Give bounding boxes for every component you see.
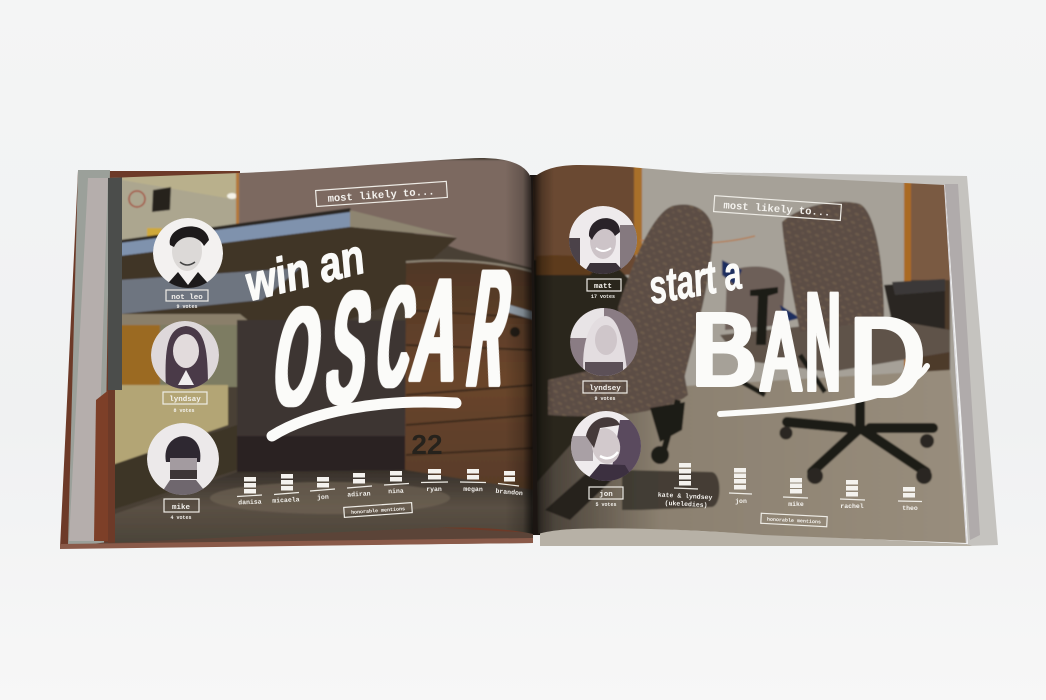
label: matt: matt bbox=[594, 283, 612, 291]
heading: OSCAR: O bbox=[268, 281, 329, 432]
chair base bbox=[787, 395, 933, 472]
tally: ryan: ryan bbox=[426, 486, 442, 493]
label: lyndsay: 8 votes bbox=[173, 408, 195, 414]
label: lyndsey: 9 votes bbox=[594, 396, 616, 402]
label: jon: 5 votes bbox=[595, 502, 617, 508]
heading: BAND: N bbox=[806, 263, 840, 420]
speaker bbox=[152, 187, 171, 212]
label: matt bbox=[587, 279, 621, 300]
panel: left page photo bbox=[100, 150, 540, 550]
label: lyndsay bbox=[163, 392, 207, 414]
heading: OSCAR bbox=[267, 239, 520, 436]
label: mike: 4 votes bbox=[170, 515, 192, 521]
heading: start a: start a bbox=[645, 247, 745, 314]
heading: BAND bbox=[692, 263, 927, 420]
tally: nina: nina bbox=[388, 488, 404, 495]
tally: kate & lyndsey bbox=[658, 463, 713, 509]
tally: jon bbox=[729, 468, 752, 505]
label: lyndsey bbox=[583, 381, 627, 402]
label: not leo: not leo bbox=[171, 294, 203, 302]
wood box bbox=[405, 260, 534, 490]
dark left furniture bbox=[534, 260, 629, 484]
heading: most likely to (left) bbox=[316, 181, 447, 207]
heading: most likely to (right): most likely to... bbox=[723, 200, 831, 220]
portrait: mike bbox=[147, 423, 219, 495]
tally: micaela: micaela bbox=[272, 496, 300, 505]
heading: win an: win an bbox=[239, 230, 370, 312]
portrait: lyndsey bbox=[570, 308, 638, 378]
floor bbox=[115, 470, 528, 533]
label: mike: mike bbox=[172, 504, 190, 512]
beam bbox=[120, 268, 300, 314]
tally: mike: mike bbox=[788, 501, 804, 508]
tally: kate & lyndsey: kate & lyndsey bbox=[658, 492, 713, 501]
heading: OSCAR: C bbox=[370, 260, 422, 414]
label: matt: 17 votes bbox=[591, 294, 615, 300]
tally: danisa bbox=[237, 477, 262, 506]
brown fabric wall bbox=[237, 160, 540, 270]
dark box bbox=[237, 320, 407, 436]
underline: OSCAR bbox=[272, 402, 456, 436]
underline: BAND bbox=[720, 366, 927, 414]
label: honorable mentions (right): honorable mentions bbox=[767, 517, 821, 525]
text: R bbox=[460, 239, 520, 419]
back chair bbox=[725, 266, 785, 330]
desk and black arm bbox=[883, 284, 946, 330]
dark blob bbox=[622, 470, 720, 510]
gutter shadow bbox=[533, 169, 550, 534]
floor bbox=[530, 370, 968, 550]
orange and beige bbox=[122, 324, 161, 386]
right chair back bbox=[782, 202, 884, 332]
heading: BAND: B bbox=[692, 292, 756, 407]
tally: brandon bbox=[495, 471, 523, 497]
tally: nina bbox=[384, 471, 409, 495]
shelf bbox=[120, 208, 352, 245]
tally: theo: theo bbox=[902, 505, 918, 512]
heading: BAND: D bbox=[850, 295, 924, 420]
chair arm bbox=[750, 287, 778, 345]
tally: kate & lyndsey: (ukeledies) bbox=[664, 500, 708, 509]
tally: jon: jon bbox=[735, 498, 747, 505]
panel: right page photo bbox=[530, 160, 970, 555]
tally: theo bbox=[898, 487, 922, 512]
heading: most likely to (left): most likely to... bbox=[327, 186, 435, 206]
heading: OSCAR: S bbox=[319, 262, 378, 435]
tally: rachel bbox=[840, 480, 865, 510]
tally: ryan bbox=[421, 469, 448, 493]
label: honorable mentions (left) bbox=[344, 503, 412, 517]
number 22: 22 bbox=[411, 429, 443, 460]
heading: BAND: A bbox=[762, 289, 800, 414]
tally: jon: jon bbox=[317, 494, 329, 501]
tally: megan: megan bbox=[463, 486, 483, 493]
portrait: not leo bbox=[153, 218, 223, 290]
label: honorable mentions (left): honorable mentions bbox=[351, 506, 405, 516]
label: honorable mentions (right) bbox=[761, 513, 827, 527]
brown wall bbox=[530, 160, 636, 275]
portrait: jon bbox=[571, 411, 645, 482]
heading: most likely to (right) bbox=[714, 196, 841, 220]
label: not leo: 9 votes bbox=[176, 304, 198, 310]
chair seats bbox=[720, 318, 950, 372]
portrait: lyndsay bbox=[151, 321, 219, 392]
book cover and page edges bbox=[60, 170, 998, 549]
heading: OSCAR: A bbox=[408, 252, 468, 410]
tally: micaela bbox=[272, 474, 300, 505]
left chair back bbox=[617, 204, 714, 376]
label: jon bbox=[589, 487, 623, 508]
tally: danisa: danisa bbox=[238, 499, 262, 506]
label: lyndsey: lyndsey bbox=[589, 385, 621, 393]
tally: adiran bbox=[347, 473, 372, 499]
base left bbox=[664, 400, 678, 450]
tally: jon bbox=[310, 477, 335, 501]
tally: rachel: rachel bbox=[840, 503, 864, 510]
tally: megan bbox=[460, 469, 486, 493]
portrait: matt bbox=[568, 206, 638, 276]
label: not leo bbox=[166, 290, 208, 310]
label: jon: jon bbox=[599, 491, 613, 499]
gutter shadow bbox=[510, 162, 533, 534]
label: mike bbox=[164, 499, 199, 521]
tally: mike bbox=[783, 478, 808, 508]
label: lyndsay: lyndsay bbox=[169, 396, 201, 404]
tally: brandon: brandon bbox=[495, 488, 523, 497]
ceiling and wall bbox=[109, 178, 237, 241]
tally: adiran: adiran bbox=[347, 490, 371, 499]
